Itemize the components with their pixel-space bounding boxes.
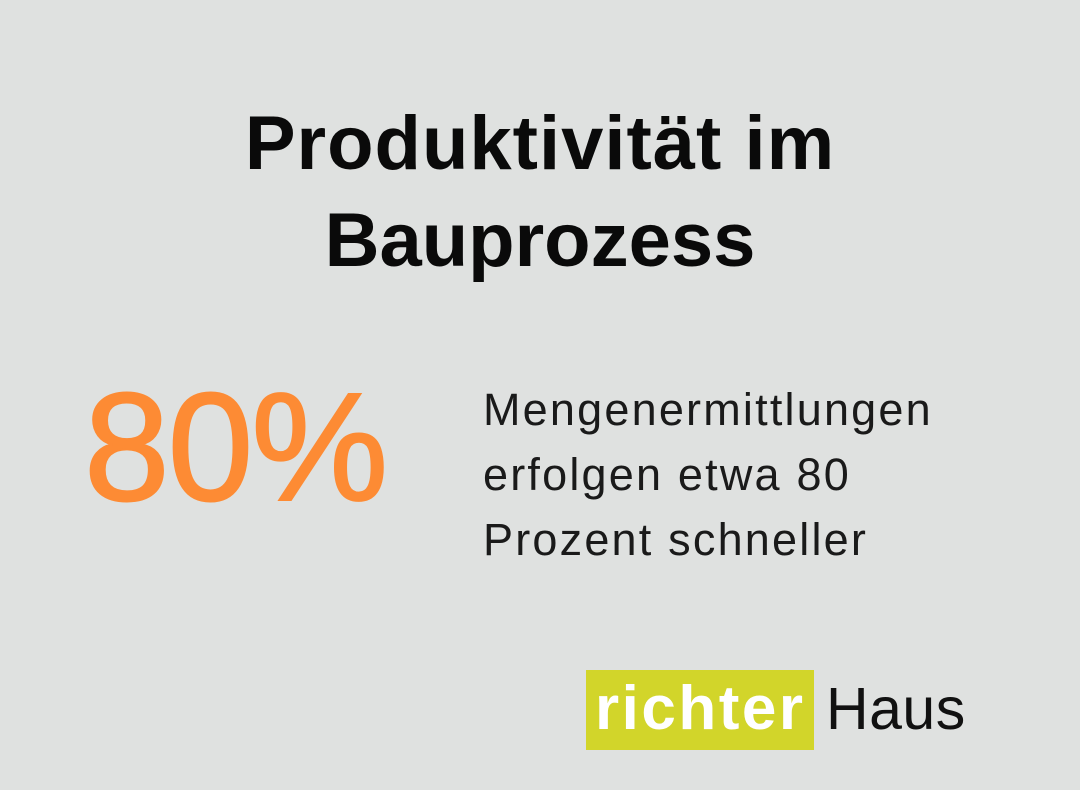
description text: Mengenermittlungen bbox=[483, 384, 933, 435]
logo text: Haus: Haus bbox=[826, 676, 966, 742]
big number: 80% bbox=[84, 361, 386, 533]
title bbox=[245, 101, 835, 283]
logo box: richter: richter bbox=[595, 674, 805, 743]
description text: erfolgen etwa 80 bbox=[483, 449, 851, 500]
logo bbox=[586, 670, 966, 750]
description text bbox=[483, 384, 933, 565]
description text: Prozent schneller bbox=[483, 514, 868, 565]
title: Produktivität im bbox=[245, 101, 835, 186]
title: Bauprozess bbox=[325, 198, 755, 283]
